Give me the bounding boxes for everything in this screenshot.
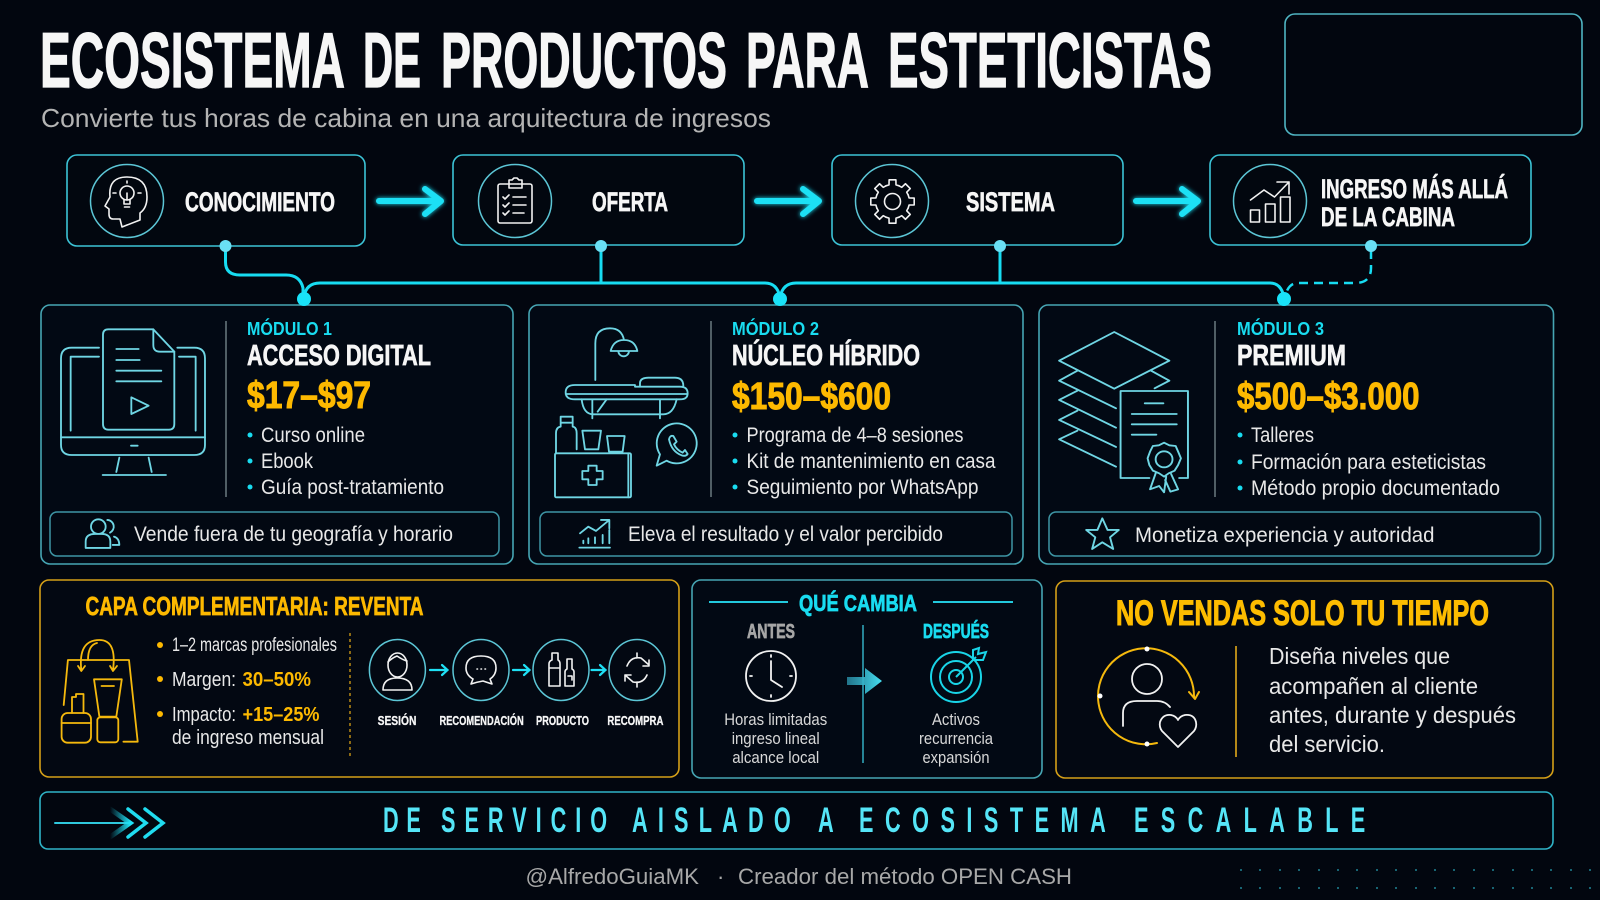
icon: bottles — [549, 653, 574, 686]
bullet list — [1238, 424, 1500, 500]
label: OFERTA — [592, 187, 668, 217]
step: ingreso mas alla de la cabina — [1210, 155, 1531, 245]
panel: capa complementaria reventa — [40, 580, 679, 777]
icon: head with light bulb — [105, 177, 147, 227]
icon: speech bubble — [466, 656, 496, 684]
bullet list — [157, 635, 337, 749]
bullet list — [248, 424, 444, 499]
connectors from steps to modules — [226, 246, 1371, 299]
icon: clipboard — [498, 178, 532, 223]
empty logo frame — [1285, 14, 1582, 135]
module label: MÓDULO 3 — [1237, 318, 1324, 339]
footer credit — [526, 864, 1072, 889]
label: CONOCIMIENTO — [185, 187, 335, 217]
flow labels: RECOMPRA — [607, 714, 663, 728]
price: $150–$600 — [732, 376, 891, 418]
bullet list: Ebook — [261, 450, 313, 473]
footer credit: @AlfredoGuiaMK — [526, 864, 699, 889]
icon: person — [383, 653, 412, 690]
after text: expansión — [922, 749, 990, 767]
title: DE — [363, 16, 421, 104]
bullet list: de ingreso mensual — [172, 727, 324, 749]
body text: antes, durante y después — [1269, 702, 1516, 728]
arrow 1 — [379, 189, 441, 214]
benefit pill — [540, 512, 1012, 556]
panel: no vendas solo tu tiempo — [1056, 581, 1553, 778]
panel: que cambia — [692, 580, 1042, 778]
panel: modulo 1 — [41, 305, 513, 564]
bullet list: 1–2 marcas profesionales — [172, 635, 337, 656]
connector dots — [220, 240, 1377, 306]
icon: target with dart — [931, 648, 986, 702]
footer credit: · — [717, 864, 724, 889]
panel heading: QUÉ CAMBIA — [799, 589, 917, 616]
bullet list: Curso online — [261, 424, 365, 447]
icon: layered sheets and certificate — [1059, 332, 1188, 492]
label: DE LA CABINA — [1321, 202, 1455, 232]
benefit pill: Monetiza experiencia y autoridad — [1135, 524, 1434, 547]
body text: acompañen al cliente — [1269, 673, 1478, 699]
flow labels: PRODUCTO — [536, 714, 589, 728]
price: $500–$3.000 — [1237, 376, 1420, 418]
step: oferta — [453, 155, 744, 245]
body text: Diseña niveles que — [1269, 643, 1450, 669]
panel: modulo 3 — [1039, 305, 1554, 564]
banner text: DE — [383, 802, 421, 840]
banner text: SERVICIO — [441, 802, 607, 840]
subtitle: Convierte tus horas de cabina en una arquitectura de ingresos — [41, 103, 771, 133]
panel heading: CAPA COMPLEMENTARIA: REVENTA — [86, 591, 424, 621]
footer credit: Creador del método OPEN CASH — [738, 864, 1072, 889]
icon: arrow — [847, 668, 882, 694]
before text: ingreso lineal — [732, 730, 820, 748]
banner text: ESCALABLE — [1134, 802, 1365, 840]
banner text: AISLADO — [632, 802, 791, 840]
banner text: A — [818, 802, 834, 840]
banner text: ECOSISTEMA — [859, 802, 1106, 840]
title: PARA — [746, 16, 869, 104]
step: sistema — [832, 155, 1123, 245]
benefit pill — [1049, 512, 1540, 556]
title — [40, 16, 1212, 104]
icon: gear — [871, 180, 914, 223]
step: conocimiento — [67, 155, 365, 246]
bullet list: Talleres — [1251, 424, 1314, 447]
before heading: ANTES — [747, 621, 795, 643]
banner — [40, 792, 1553, 849]
after text — [919, 711, 994, 767]
banner text — [383, 802, 1365, 840]
price: $17–$97 — [247, 375, 371, 417]
module heading: ACCESO DIGITAL — [247, 340, 431, 372]
icon: cycle arrows — [625, 653, 649, 687]
benefit pill: Vende fuera de tu geografía y horario — [134, 523, 453, 546]
icon: treatment bed, kit and whatsapp — [555, 328, 697, 497]
arrow 3 — [1136, 189, 1198, 214]
bullet list: +15–25% — [242, 704, 320, 726]
before text — [724, 711, 827, 767]
flow labels — [378, 713, 663, 728]
arrow 2 — [757, 189, 819, 214]
icon: growth chart — [1250, 182, 1290, 222]
module label: MÓDULO 1 — [247, 318, 332, 339]
icon: speed arrow — [55, 809, 163, 837]
label: SISTEMA — [966, 187, 1055, 217]
bullet list: Seguimiento por WhatsApp — [746, 476, 978, 499]
icon: shopping bag with products — [62, 640, 138, 743]
module heading: NÚCLEO HÍBRIDO — [732, 338, 920, 372]
bullet list: Programa de 4–8 sesiones — [746, 424, 964, 447]
module label: MÓDULO 2 — [732, 318, 819, 339]
before text: Horas limitadas — [724, 711, 827, 729]
benefit pill: Eleva el resultado y el valor percibido — [628, 523, 943, 546]
icon: clock — [746, 651, 796, 701]
bullet list: Impacto: — [172, 704, 236, 726]
bullet list: Método propio documentado — [1251, 477, 1500, 500]
title: ECOSISTEMA — [40, 16, 345, 104]
title: PRODUCTOS — [441, 16, 727, 104]
after heading: DESPUÉS — [923, 620, 989, 643]
icon: monitor with document — [61, 329, 205, 475]
label: INGRESO MÁS ALLÁ — [1321, 173, 1508, 204]
panel: modulo 2 — [529, 305, 1023, 564]
bullet list: 30–50% — [242, 669, 311, 691]
benefit pill — [50, 512, 499, 556]
body text: del servicio. — [1269, 731, 1385, 757]
resale flow — [369, 640, 665, 728]
label — [1321, 173, 1508, 232]
bullet list: Kit de mantenimiento en casa — [746, 450, 996, 473]
flow labels: SESIÓN — [378, 713, 416, 728]
bullet list: Guía post-tratamiento — [261, 476, 444, 499]
flow arrows — [430, 665, 606, 675]
title: ESTETICISTAS — [888, 16, 1212, 104]
bullet list: Formación para esteticistas — [1251, 451, 1486, 474]
icon: client cycle with heart — [1098, 646, 1199, 747]
bullet list: Margen: — [172, 669, 236, 691]
bullet list — [732, 424, 996, 499]
after text: recurrencia — [919, 730, 994, 748]
body text — [1269, 643, 1516, 757]
module heading: PREMIUM — [1237, 340, 1346, 372]
flow labels: RECOMENDACIÓN — [440, 713, 524, 728]
before text: alcance local — [732, 749, 819, 767]
after text: Activos — [932, 711, 980, 729]
